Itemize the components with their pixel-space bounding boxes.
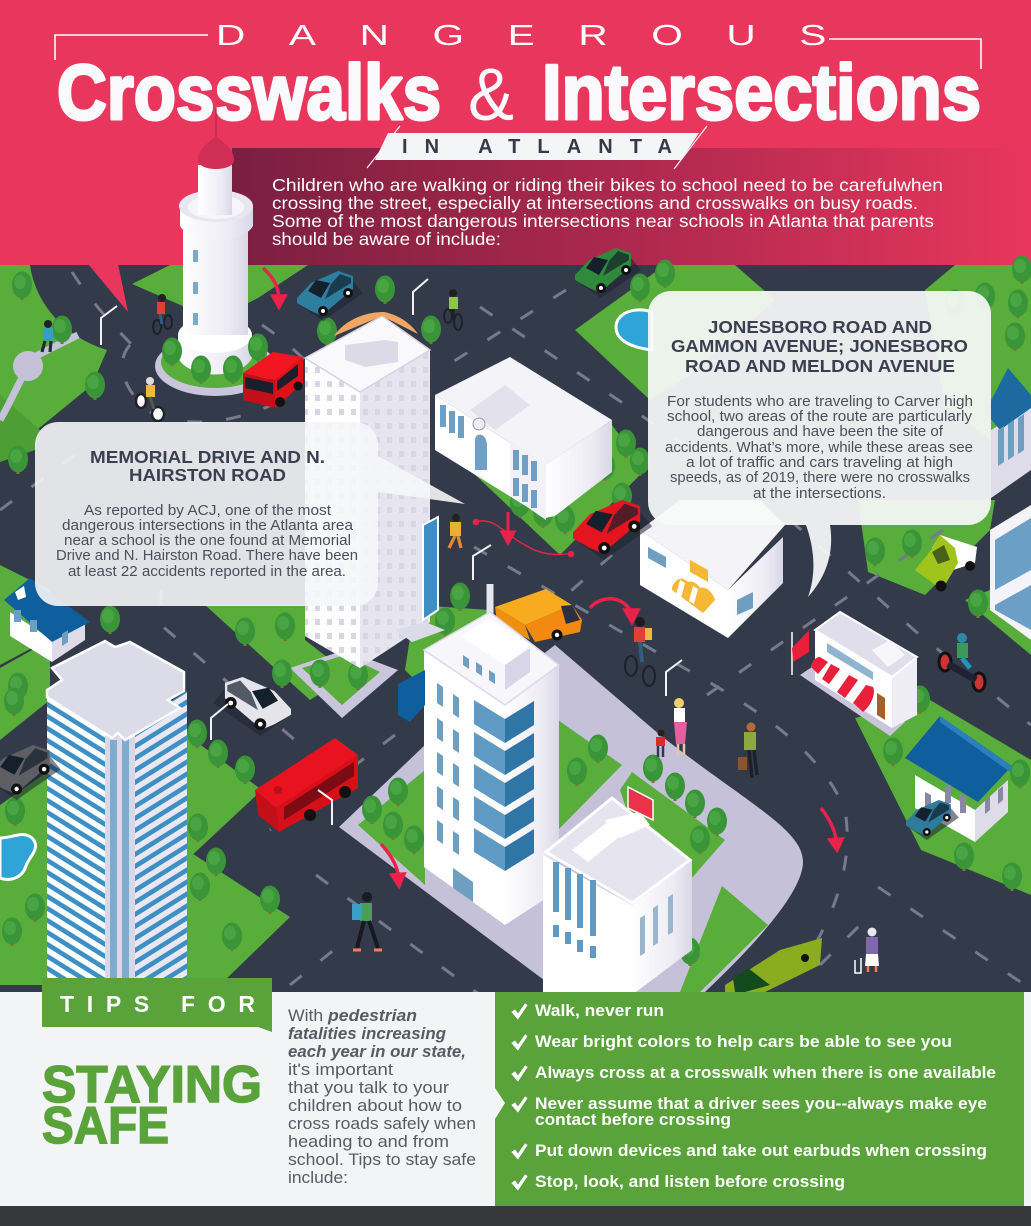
tip list text: Put down devices and take out earbuds when crossing	[535, 1142, 987, 1160]
building: red-awning shop	[800, 612, 917, 736]
orange garden behind tower	[334, 312, 418, 336]
tower island	[155, 336, 275, 396]
title: dangerous: DANGEROUS	[216, 20, 826, 52]
vehicle: red car	[573, 500, 652, 560]
green lots and plazas	[0, 265, 1031, 992]
trees	[2, 256, 1031, 966]
callout heading: MEMORIAL DRIVE AND N.	[90, 447, 325, 467]
vehicle: red bus lower	[255, 738, 358, 832]
red arrow: van to cyclist	[590, 599, 638, 622]
tips panel: green list	[495, 992, 1031, 1206]
callout heading: JONESBORO ROAD AND	[708, 317, 932, 337]
callout body: school, two areas of the route are particularly	[667, 409, 973, 425]
park fountain	[13, 351, 43, 381]
tab: tips for: TIPS FOR	[60, 991, 255, 1017]
callout body: dangerous and have been the site of	[697, 424, 944, 440]
callout heading: GAMMON AVENUE; JONESBORO	[671, 336, 968, 356]
vehicle: green car	[575, 248, 641, 298]
title: crosswalks and intersections	[57, 48, 981, 136]
tip list text: Always cross at a crosswalk when there is one available	[535, 1064, 996, 1082]
callout body: at least 22 accidents reported in the area.	[68, 564, 346, 580]
vehicle: red bus top	[243, 352, 303, 408]
callout heading: ROAD AND MELDON AVENUE	[685, 356, 955, 376]
pedestrian: woman and child	[656, 698, 687, 757]
tip list text	[535, 1002, 996, 1191]
banner: in atlanta: IN ATLANTA	[402, 136, 672, 158]
building: blue-roof house right	[905, 716, 1012, 842]
tips intro paragraph: With pedestrian	[288, 1007, 417, 1025]
pedestrian: yellow backpack runner	[449, 514, 461, 548]
intro paragraph: Children who are walking or riding their bikes to school need to be carefulwhen	[272, 175, 943, 195]
red arrow: lower left	[381, 844, 404, 886]
red arrow: curve right	[821, 808, 842, 850]
vehicle: lime truck	[725, 938, 822, 992]
title frame lines	[55, 35, 981, 69]
tips intro paragraph: fatalities increasing	[288, 1025, 446, 1043]
tip list text: contact before crossing	[535, 1111, 731, 1129]
heading: staying safe	[42, 1056, 262, 1155]
tips intro paragraph: include:	[288, 1169, 348, 1187]
tips intro paragraph: school. Tips to stay safe	[288, 1151, 476, 1169]
callout heading	[90, 447, 325, 485]
red arrow: school	[502, 512, 514, 543]
check icons	[511, 1003, 528, 1191]
callout body: at the intersections.	[753, 486, 886, 502]
callout heading: HAIRSTON ROAD	[129, 465, 286, 485]
tab: tips for	[42, 978, 272, 1032]
red arrow: tower	[263, 268, 285, 307]
red dotted route	[473, 519, 574, 557]
footer strip	[0, 1206, 1031, 1226]
intro paragraph: should be aware of include:	[272, 229, 501, 249]
heading: staying safe: SAFE	[42, 1097, 169, 1155]
building: school	[435, 357, 612, 520]
building: left skyscraper	[47, 641, 187, 990]
callout: Jonesboro Road	[648, 291, 991, 597]
callout heading	[671, 317, 968, 376]
tips intro paragraph: it's important	[288, 1061, 393, 1079]
tips intro paragraph: cross roads safely when	[288, 1115, 476, 1133]
street lamps	[101, 279, 682, 825]
intro paragraph: crossing the street, especially at intersections and crosswalks on busy roads.	[272, 193, 918, 213]
road dashes	[0, 272, 1031, 995]
callout body	[665, 394, 973, 502]
park path	[0, 335, 78, 420]
swimming pool	[616, 310, 652, 350]
cyclist: red	[153, 294, 172, 334]
tips intro paragraph	[288, 1007, 476, 1187]
tip list text: Stop, look, and listen before crossing	[535, 1173, 845, 1191]
callout: Memorial Drive	[35, 422, 465, 606]
red rooftop sign	[628, 787, 653, 820]
speech tail under header	[88, 264, 128, 312]
tip list text: Never assume that a driver sees you--always make eye	[535, 1095, 987, 1113]
tower	[178, 108, 253, 374]
callout body: speeds, as of 2019, there were no crosswalks	[670, 470, 970, 486]
building: hexagonal tower	[305, 316, 430, 668]
cyclist: green	[444, 289, 462, 330]
motorcyclist	[939, 633, 985, 691]
title: crosswalks and intersections: Crosswalks	[57, 48, 441, 136]
pedestrian: elderly woman with walker	[855, 928, 879, 973]
car in garage	[906, 800, 959, 840]
heading: staying safe: STAYING	[42, 1056, 262, 1114]
tips intro paragraph: children about how to	[288, 1097, 462, 1115]
swimming pool left	[0, 834, 36, 880]
header text panel	[232, 148, 1031, 265]
building: lower white block	[543, 798, 692, 995]
red flag	[792, 630, 809, 675]
vehicle: lime jeep	[915, 535, 977, 592]
vehicle: white car	[213, 677, 291, 736]
callout body: a lot of traffic and cars traveling at high	[686, 455, 953, 471]
intro paragraph: Some of the most dangerous intersections near schools in Atlanta that parents	[272, 211, 934, 231]
building: shop under callout	[640, 500, 785, 638]
callout body	[56, 503, 358, 580]
intro paragraph	[272, 175, 943, 249]
callout body: Drive and N. Hairston Road. There have been	[56, 548, 358, 564]
entrance canopy	[395, 622, 445, 642]
vehicle: gray car	[0, 745, 61, 800]
cyclist: red shirt	[625, 617, 655, 686]
callout body: As reported by ACJ, one of the most	[84, 503, 331, 519]
tip list text: Wear bright colors to help cars be able to see you	[535, 1033, 952, 1051]
callout body: accidents. What’s more, while these areas see	[665, 440, 973, 456]
building: blue-roof house left	[4, 578, 90, 662]
building: upper right	[985, 368, 1031, 498]
tip list text: Walk, never run	[535, 1002, 664, 1020]
tips intro paragraph: that you talk to your	[288, 1079, 450, 1097]
tips intro paragraph: heading to and from	[288, 1133, 449, 1151]
pedestrian: man with briefcase	[738, 722, 757, 778]
banner: in atlanta	[367, 126, 707, 169]
vehicle: dark blue bus	[398, 670, 425, 722]
tower base trees	[162, 334, 268, 384]
callout body: For students who are traveling to Carver high	[667, 394, 973, 410]
title: crosswalks and intersections: Intersections	[542, 48, 981, 136]
header background	[0, 0, 1031, 265]
tips panel: left	[0, 978, 495, 1206]
vehicle: blue car	[297, 271, 363, 321]
building: central tower	[424, 584, 559, 925]
pedestrian: teal walker	[42, 320, 53, 352]
tips intro paragraph: each year in our state,	[288, 1043, 466, 1061]
glass sign panel	[423, 517, 438, 620]
callout body: dangerous intersections in the Atlanta area	[62, 518, 354, 534]
callout body: near a school is the one found at Memorial	[64, 533, 351, 549]
pedestrian: boy with backpack	[352, 892, 382, 950]
building: right glass	[990, 505, 1031, 640]
title: crosswalks and intersections: &	[468, 53, 514, 136]
vehicle: orange van	[495, 589, 582, 642]
cyclist: yellow helmet	[136, 377, 164, 421]
